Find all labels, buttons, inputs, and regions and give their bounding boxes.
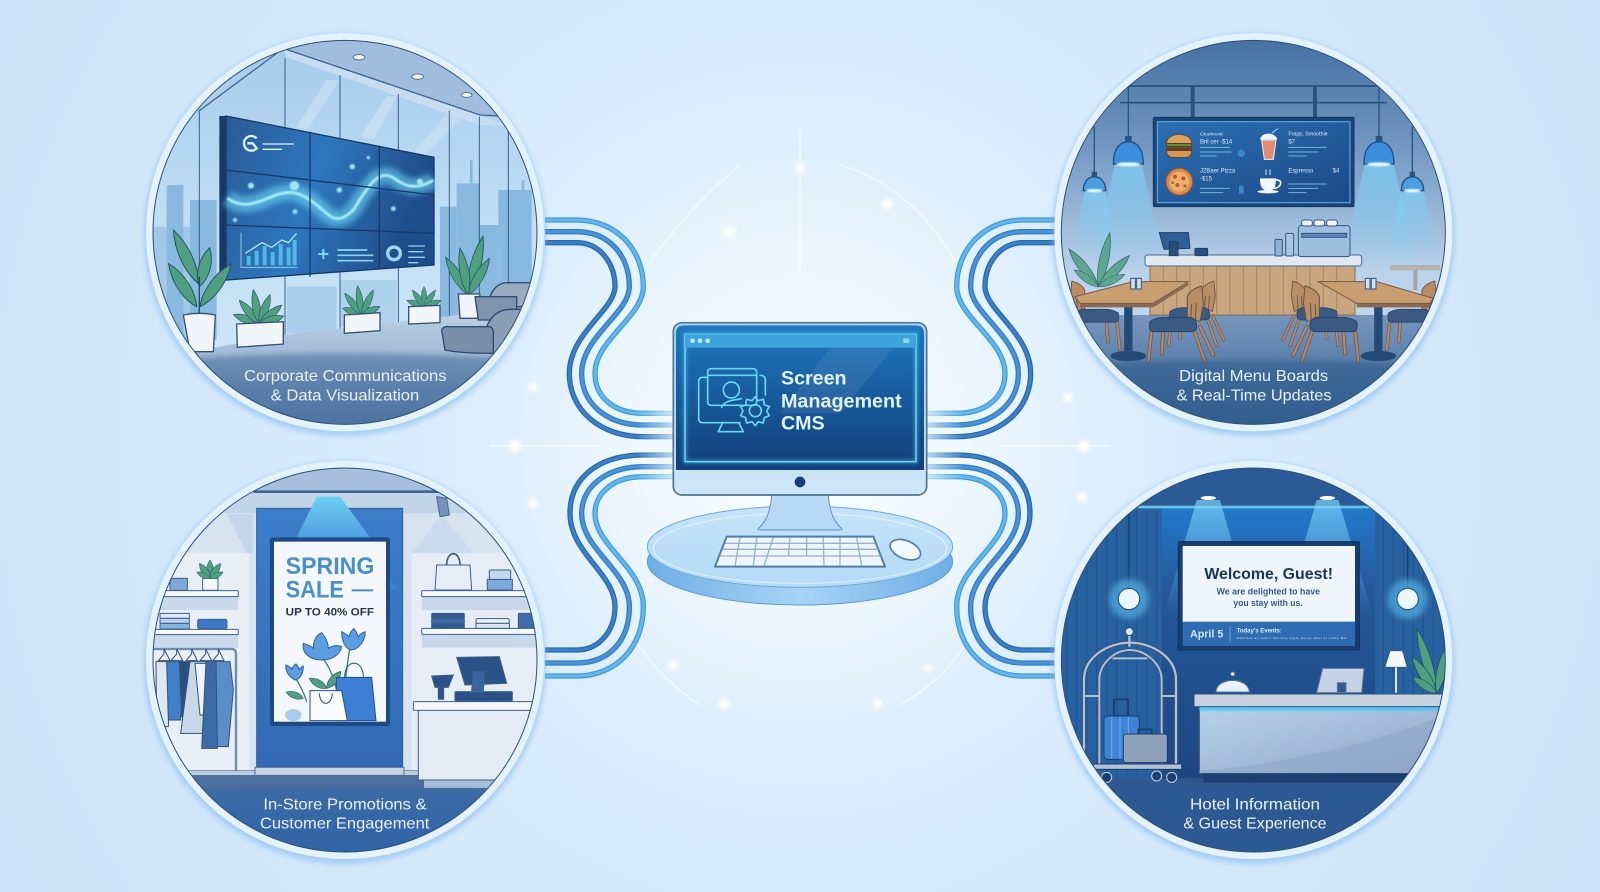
label: digital menu boards: & Real-Time Updates <box>1176 387 1332 404</box>
bar chart <box>241 233 297 267</box>
welcome screen: Welcome, Guest! <box>1204 566 1333 583</box>
clothing rack <box>153 649 240 772</box>
menu board: Bril cer -$14 <box>1200 139 1233 145</box>
label: in-store promotions: In-Store Promotions & <box>263 796 427 813</box>
outer chairs <box>1061 281 1445 349</box>
round platform <box>647 506 953 605</box>
label: in-store promotions: Customer Engagement <box>260 816 430 833</box>
keyboard <box>715 537 885 567</box>
drink <box>1260 129 1278 159</box>
label: corporate communications: & Data Visualization <box>271 387 419 404</box>
menu board: -$15 <box>1200 177 1213 183</box>
panel: in-store promotions <box>140 450 560 870</box>
panel: hotel information <box>1040 450 1460 870</box>
ceiling rail <box>1120 86 1387 117</box>
menu board: Frapp, Smoothie <box>1288 131 1328 137</box>
video wall <box>219 116 434 280</box>
CMS title: CMS <box>781 412 825 434</box>
label: digital menu boards: Digital Menu Boards <box>1179 368 1328 385</box>
CMS title: Screen <box>781 367 847 389</box>
luggage cart <box>1084 628 1176 767</box>
floor <box>1040 778 1460 870</box>
glow strip <box>1138 506 1377 508</box>
mouse <box>887 535 924 564</box>
register <box>1159 233 1208 256</box>
screen logo <box>244 136 294 151</box>
poster text: SPRING <box>286 553 374 580</box>
curtain panels <box>1053 508 1455 782</box>
menu board: $7 <box>1288 139 1296 145</box>
central hub: desktop computer on platform <box>647 323 953 605</box>
welcome screen: you stay with us. <box>1233 598 1303 608</box>
reception desk <box>1194 694 1447 783</box>
ceiling <box>1040 450 1460 507</box>
panel: digital menu boards <box>1040 20 1460 440</box>
panel: corporate communications <box>140 20 560 440</box>
monitor stand <box>758 495 842 530</box>
menu board: J2Baer Pizza <box>1200 169 1236 175</box>
shelf shadows <box>153 597 542 648</box>
burger <box>1167 135 1192 157</box>
flowers and shopping bags <box>286 629 365 702</box>
welcome screen: Today's Events: <box>1237 628 1282 634</box>
lamp beams <box>1074 164 1435 256</box>
label band <box>199 350 492 420</box>
digital poster stand <box>255 497 404 775</box>
security camera <box>437 497 449 517</box>
CMS icon <box>699 369 769 432</box>
table lamp <box>1385 651 1407 693</box>
front chairs <box>1148 281 1358 362</box>
label: hotel information <box>1183 796 1327 833</box>
CMS title: Management <box>781 390 902 412</box>
plants <box>164 228 493 352</box>
connector cables: right side <box>926 220 1055 676</box>
pendant lamps <box>1083 87 1424 192</box>
payment counter <box>413 657 553 789</box>
welcome screen <box>1178 542 1359 650</box>
tables <box>1075 278 1433 361</box>
plant <box>1068 232 1130 288</box>
poster text <box>286 557 374 616</box>
menu board: Espresso <box>1288 169 1314 175</box>
counter <box>1145 255 1362 315</box>
plant <box>1408 627 1451 697</box>
label: corporate communications: Corporate Communications <box>244 368 447 385</box>
welcome screen: April 5 <box>1190 629 1223 641</box>
poster text: SALE <box>286 577 344 604</box>
pizza <box>1166 168 1193 195</box>
wall lamps <box>1109 510 1428 619</box>
menu board <box>1153 117 1354 207</box>
floor <box>196 315 493 424</box>
label: digital menu boards <box>1176 368 1332 404</box>
ceiling <box>289 41 496 116</box>
label: hotel information: & Guest Experience <box>1183 816 1327 833</box>
floor <box>1084 315 1422 424</box>
service bell <box>1216 672 1249 692</box>
city skyline <box>140 160 532 340</box>
floor <box>192 776 486 852</box>
connector cables: left side <box>545 220 674 676</box>
coffee machine <box>1275 220 1350 257</box>
label: corporate communications <box>244 368 447 404</box>
monitor body <box>673 323 927 495</box>
coffee cup <box>1257 169 1281 193</box>
right shelves <box>422 554 542 634</box>
poster text: UP TO 40% OFF <box>286 607 374 619</box>
wall spots <box>227 514 253 553</box>
left shelves <box>153 578 238 635</box>
menu board: Gluehnost <box>1200 131 1223 137</box>
menu board: $4 <box>1333 169 1340 175</box>
center halo and network arcs <box>490 130 1110 730</box>
label: hotel information: Hotel Information <box>1190 796 1320 813</box>
lounge chairs <box>442 283 540 353</box>
label: in-store promotions <box>260 796 430 833</box>
CMS title <box>781 367 902 434</box>
welcome screen: We are delighted to have <box>1217 586 1320 596</box>
welcome screen: Wellness at resort: Morning Yoga; Happy Hour at Lobby Bar <box>1237 636 1347 640</box>
laptop <box>1317 668 1364 693</box>
back table <box>1390 265 1440 290</box>
store ceiling <box>222 468 468 514</box>
